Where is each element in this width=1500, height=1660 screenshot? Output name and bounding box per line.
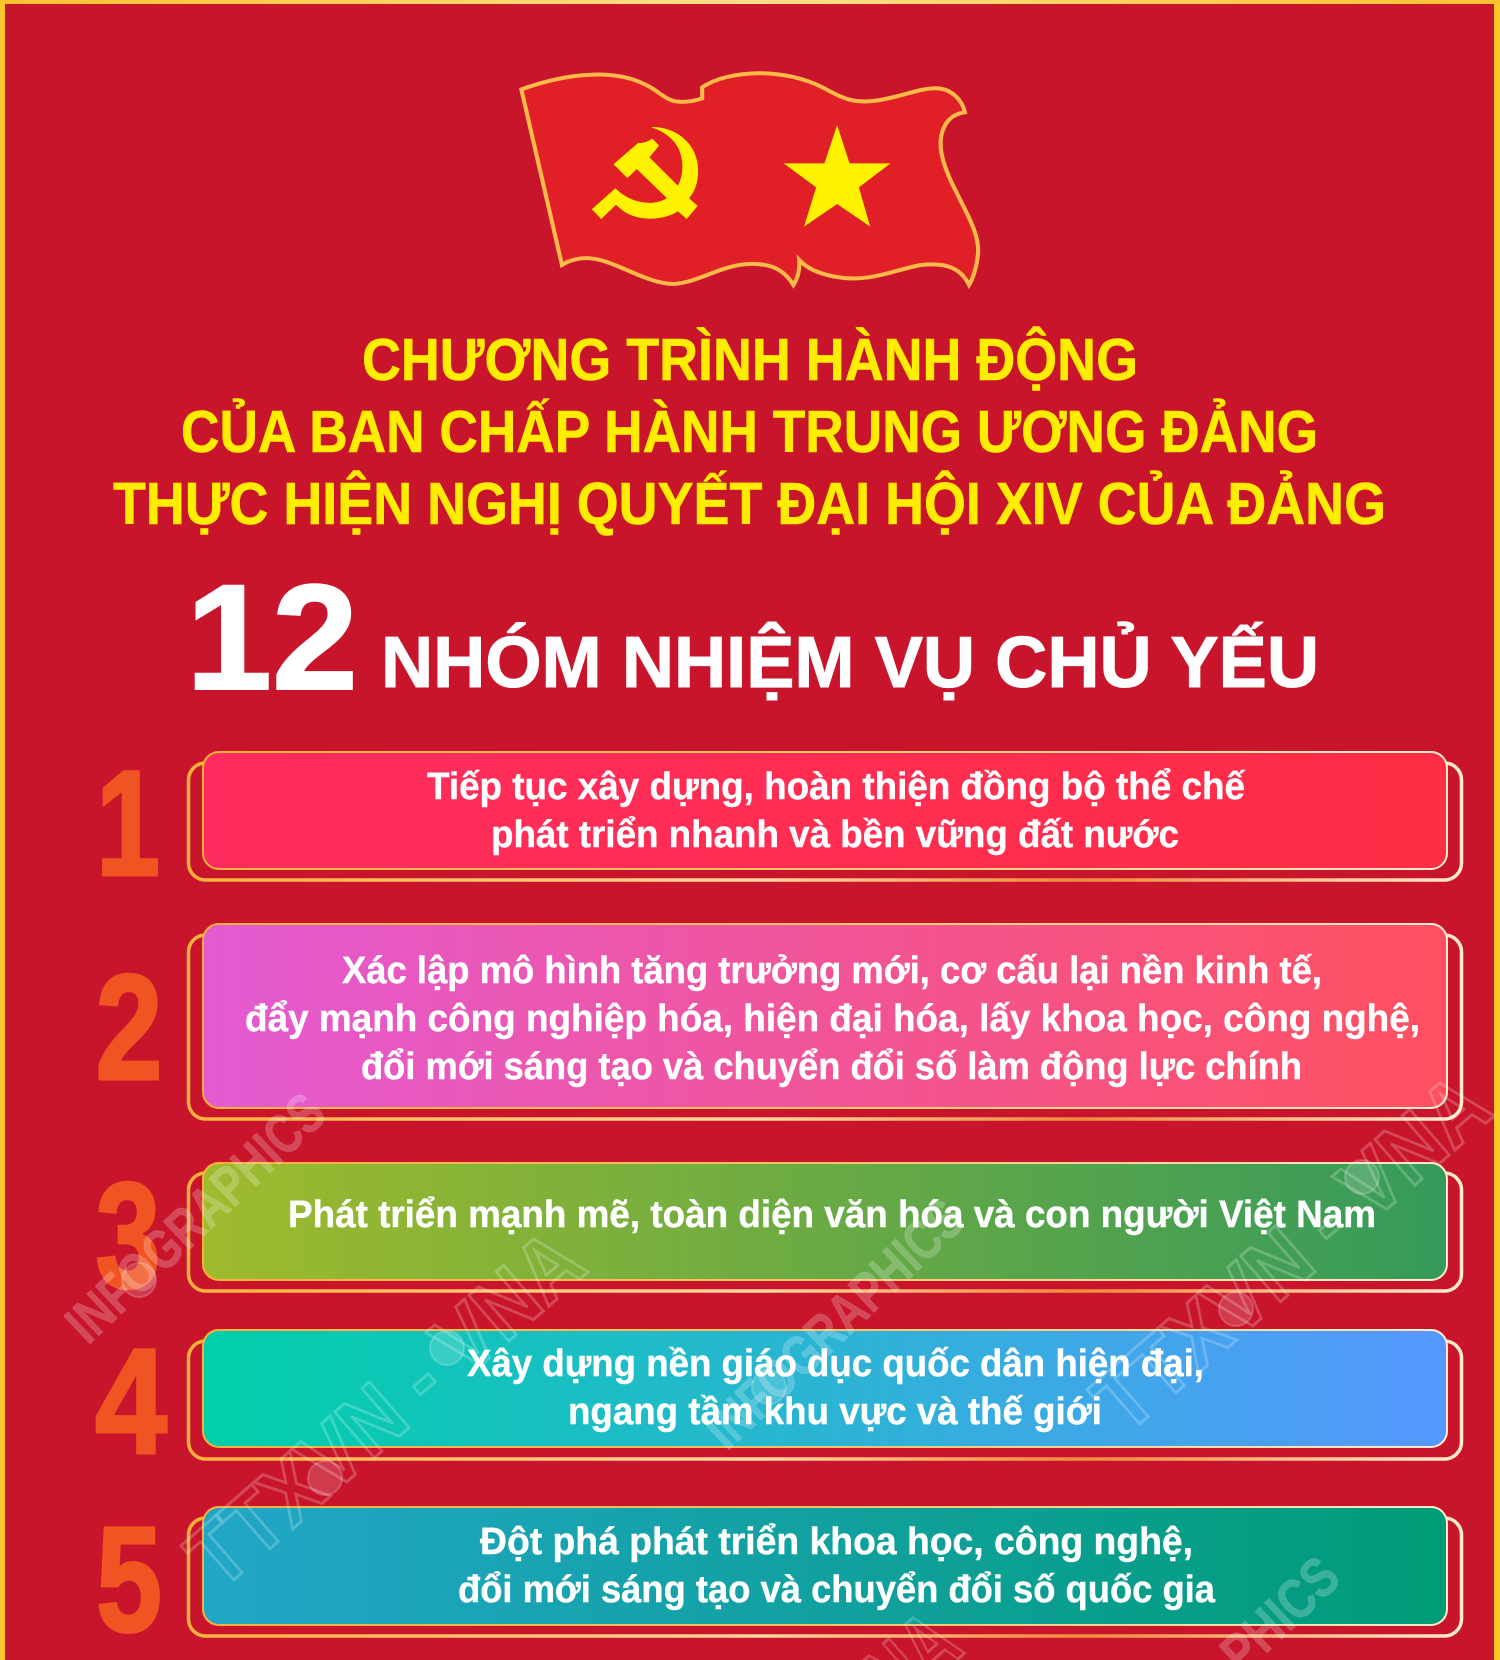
number 5: 5 [96,1495,162,1660]
number 4: 4 [95,1317,167,1485]
panel: task 2 [96,924,1462,1119]
text: task 1: Tiếp tục xây dựng, hoàn thiện đồng bộ thể chế [427,766,1246,808]
panel: task 5 [96,1495,1462,1660]
icon: star [784,125,891,227]
icon: hammer and sickle [593,127,698,218]
watermark: TTXVN - VNA [168,1210,602,1606]
text: task 2: Xác lập mô hình tăng trưởng mới, cơ cấu lại nền kinh tế, [342,950,1322,992]
number 3: 3 [96,1151,160,1319]
text: task 1 [427,766,1246,856]
title: THỰC HIỆN NGHỊ QUYẾT ĐẠI HỘI XIV CỦA ĐẢNG [113,470,1386,537]
subtitle: 12 task groups [186,553,1319,721]
subtitle: 12 task groups: 12 [186,553,358,721]
text: task 5 [458,1521,1216,1611]
text: task 2: đẩy mạnh công nghiệp hóa, hiện đại hóa, lấy khoa học, công nghệ, [245,998,1420,1040]
text: task 1: phát triển nhanh và bền vững đất nước [491,814,1179,856]
text: task 5: đổi mới sáng tạo và chuyển đổi số quốc gia [458,1569,1216,1611]
text: task 5: Đột phá phát triển khoa học, công nghệ, [480,1521,1193,1563]
watermark [53,1054,1500,1660]
watermark: INFOGRAPHICS [692,1186,976,1461]
text: task 4: ngang tầm khu vực và thế giới [568,1391,1102,1433]
panel: task 1 [96,739,1462,907]
text: task 4 [467,1343,1204,1433]
title [113,326,1386,537]
title: CHƯƠNG TRÌNH HÀNH ĐỘNG [362,326,1138,393]
panel: task 3 [96,1151,1462,1319]
number 1: 1 [96,739,160,907]
watermark: INFOGRAPHICS [53,1080,337,1355]
text: task 3: Phát triển mạnh mẽ, toàn diện văn hóa và con người Việt Nam [288,1194,1376,1236]
text: task 2 [245,950,1420,1088]
subtitle: 12 task groups: NHÓM NHIỆM VỤ CHỦ YẾU [381,622,1319,703]
title: CỦA BAN CHẤP HÀNH TRUNG ƯƠNG ĐẢNG [181,398,1318,465]
text: task 4: Xây dựng nền giáo dục quốc dân hiện đại, [467,1343,1204,1385]
number 2: 2 [96,943,162,1111]
icon: party flag [521,73,978,285]
text: task 2: đổi mới sáng tạo và chuyển đổi số làm động lực chính [361,1046,1302,1088]
panel: task 4 [95,1317,1462,1485]
